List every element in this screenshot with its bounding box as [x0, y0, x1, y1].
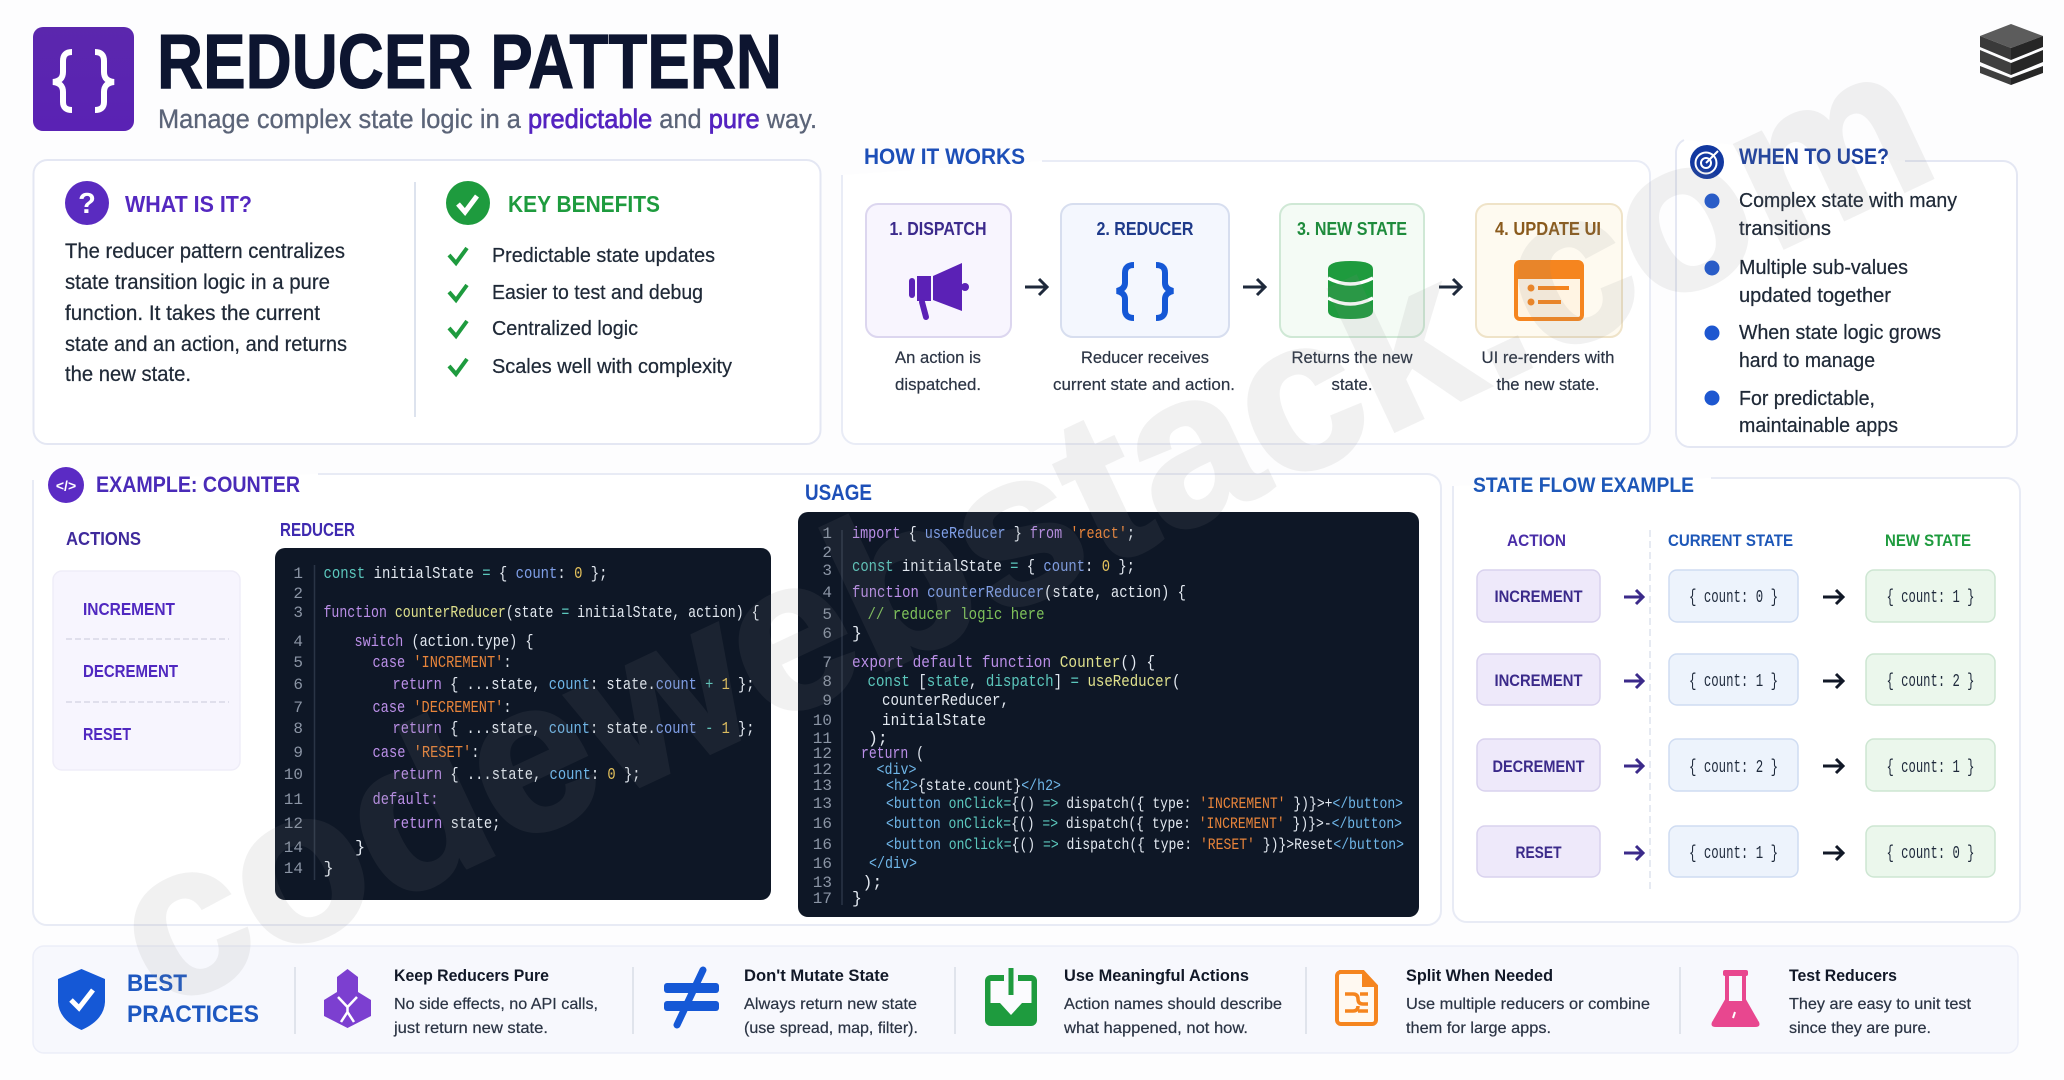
code block: usage: 1 [822, 525, 832, 543]
code block: reducer: 4 [293, 633, 303, 651]
list: benefits: Easier to test and debug [492, 282, 703, 304]
text block: definition: The reducer pattern centralizes [65, 240, 345, 263]
subtitle: Manage complex state logic in a predictable and pure way. [158, 104, 817, 134]
code block: usage: 9 [822, 692, 832, 710]
heading: example counter: EXAMPLE: COUNTER [96, 472, 300, 497]
step: reducer: 2. REDUCER [1096, 218, 1194, 239]
code block: usage: 12 [813, 761, 832, 779]
code block: usage: ); [862, 873, 882, 892]
panel: what is it and key benefits [34, 160, 820, 444]
step: update ui: 4. UPDATE UI [1495, 218, 1601, 239]
code block: usage: } [852, 889, 862, 908]
code block: reducer: 9 [293, 744, 303, 762]
code block: usage: 6 [822, 625, 832, 643]
best practice: split when needed: Split When Needed [1406, 966, 1553, 985]
text block: definition: function. It takes the current [65, 302, 320, 325]
icon: braces [1117, 265, 1173, 318]
code block: reducer: case 'DECREMENT': [372, 699, 512, 718]
flow row 2: { count: 1 } [1689, 672, 1778, 692]
code block: usage: 8 [822, 673, 832, 691]
best practice: keep reducers pure: No side effects, no API calls, [394, 996, 598, 1013]
code block: usage: return ( [861, 744, 924, 763]
list: benefits: Predictable state updates [492, 245, 715, 267]
code block: usage: 13 [813, 795, 832, 813]
list: actions: RESET [83, 724, 131, 744]
code block: usage: 16 [813, 836, 832, 854]
code block: reducer: case 'INCREMENT': [372, 654, 512, 673]
code block: reducer: 8 [293, 720, 303, 738]
flow row 2: { count: 2 } [1886, 672, 1974, 692]
best practice: use meaningful actions: what happened, not how. [1063, 1020, 1248, 1037]
flow row 1: INCREMENT [1494, 588, 1582, 606]
step: dispatch: An action is [895, 348, 981, 367]
best practice: don't mutate state: Don't Mutate State [744, 966, 889, 985]
column headers: NEW STATE [1885, 531, 1971, 550]
code block: usage: counterReducer, [882, 691, 1009, 710]
code block: reducer: default: [372, 791, 438, 810]
flow row 3: { count: 1 } [1886, 758, 1974, 778]
list: when to use: Complex state with many [1739, 190, 1957, 212]
code block: usage: 5 [822, 606, 832, 624]
code block: reducer: return { ...state, count: 0 }; [392, 766, 640, 785]
heading: how it works: HOW IT WORKS [864, 144, 1025, 169]
list: actions: INCREMENT [83, 599, 175, 619]
best practice: split when needed [1406, 966, 1650, 1037]
list: when to use: transitions [1739, 218, 1831, 240]
code block: reducer: 1 [293, 565, 303, 583]
code block: usage: 13 [813, 777, 832, 795]
code block: reducer: return { ...state, count: state.count + 1 }; [392, 676, 754, 695]
best practice: split when needed: Use multiple reducers or combine [1406, 996, 1650, 1013]
heading: actions: ACTIONS [66, 528, 141, 549]
icon: green check [446, 181, 490, 225]
panel: how it works [842, 144, 1650, 444]
flow row 3: { count: 2 } [1689, 758, 1778, 778]
code block: usage: </div> [869, 854, 917, 873]
column headers: CURRENT STATE [1668, 531, 1793, 550]
code block: reducer: return state; [392, 815, 500, 834]
code block: reducer: 10 [284, 766, 303, 784]
title: REDUCER PATTERN [157, 19, 782, 105]
list: actions [53, 571, 240, 770]
best practice: don't mutate state: (use spread, map, filter). [744, 1020, 918, 1037]
step: reducer: current state and action. [1053, 375, 1235, 394]
code block: usage: import { useReducer } from 'react'; [852, 524, 1135, 543]
code block: usage: 2 [822, 544, 832, 562]
code block: usage: initialState [882, 711, 986, 730]
icon: megaphone [909, 263, 969, 317]
icon: stacked layers logo [1980, 24, 2043, 85]
flow row 3: DECREMENT [1492, 758, 1584, 776]
code block: usage: function counterReducer(state, action) { [852, 583, 1186, 602]
icon: purple hexagon [324, 969, 371, 1028]
step: dispatch [866, 204, 1011, 394]
code block: usage: <button onClick={() => dispatch({ type: 'INCREMENT' })}>+</button> [886, 795, 1403, 813]
heading: best practices [127, 970, 259, 1028]
icon: flask [1712, 970, 1760, 1027]
heading: key benefits: KEY BENEFITS [508, 191, 660, 217]
step: reducer [1053, 204, 1235, 394]
code block: usage: 11 [813, 730, 832, 748]
code block: reducer: function counterReducer(state = initialState, action) { [324, 604, 760, 623]
step: update ui [1476, 204, 1622, 394]
code block: reducer: 12 [284, 815, 303, 833]
code block: usage: <h2>{state.count}</h2> [886, 777, 1061, 795]
flow row 2 [1477, 654, 1995, 705]
step: new state: Returns the new [1292, 348, 1413, 367]
code block: usage: <button onClick={() => dispatch({ type: 'RESET' })}>Reset</button> [886, 836, 1404, 854]
code block: reducer: 6 [293, 676, 303, 694]
best practice: keep reducers pure: just return new state. [393, 1020, 548, 1037]
code block: reducer: 14 [284, 860, 303, 878]
icon: ui window [1516, 262, 1582, 319]
code block: reducer: 2 [293, 585, 303, 603]
list: benefits [449, 245, 732, 378]
flow row 3 [1477, 739, 1995, 791]
arrow [1243, 279, 1265, 295]
panel: state flow example [1453, 474, 2020, 922]
icon: question mark [65, 181, 109, 225]
code block: usage: } [852, 624, 862, 643]
icon: target [1690, 145, 1724, 179]
best practice: test reducers: since they are pure. [1789, 1020, 1931, 1037]
icon: inbox [985, 968, 1037, 1026]
flow row 1 [1477, 570, 1995, 622]
code block: usage: 16 [813, 815, 832, 833]
watermark: codewebstack.com [77, 0, 1964, 1053]
best practice: don't mutate state [744, 966, 918, 1037]
code block: reducer: 3 [293, 604, 303, 622]
step: new state: state. [1332, 375, 1372, 394]
panel: best practices [33, 946, 2018, 1053]
code block: usage: // reducer logic here [868, 605, 1044, 624]
heading: usage: USAGE [805, 480, 872, 505]
code block: usage: 3 [822, 562, 832, 580]
list: benefits: Centralized logic [492, 318, 638, 340]
flow row 4 [1477, 826, 1995, 877]
list: when to use: When state logic grows [1739, 322, 1941, 344]
icon: code tag [48, 467, 84, 503]
heading: when to use: WHEN TO USE? [1739, 144, 1889, 169]
code block: reducer: } [324, 860, 334, 879]
best practice: test reducers: They are easy to unit test [1789, 996, 1972, 1013]
column headers: ACTION [1507, 531, 1566, 550]
code block: usage: export default function Counter() { [852, 653, 1155, 672]
heading: what is it: WHAT IS IT? [125, 191, 252, 217]
icon: question mark: ? [78, 188, 96, 220]
step: new state [1280, 204, 1424, 394]
best practice: use meaningful actions: Action names should describe [1064, 996, 1282, 1013]
text block: definition: the new state. [65, 363, 191, 386]
step: dispatch: dispatched. [895, 375, 981, 394]
code block: usage [798, 512, 1419, 917]
code block: reducer: return { ...state, count: state.count - 1 }; [392, 720, 754, 739]
column headers [1507, 531, 1971, 550]
arrow [1025, 279, 1047, 295]
best practice: keep reducers pure: Keep Reducers Pure [394, 966, 549, 985]
icon: database [1328, 261, 1373, 319]
code block: usage: 16 [813, 855, 832, 873]
step: update ui: the new state. [1496, 375, 1600, 394]
best practice: use meaningful actions: Use Meaningful Actions [1064, 966, 1249, 985]
flow row 1: { count: 1 } [1886, 588, 1974, 608]
list: when to use: Multiple sub-values [1739, 257, 1908, 279]
code block: reducer: 7 [293, 699, 303, 717]
best practice: test reducers: Test Reducers [1789, 966, 1897, 985]
best practice: split when needed: them for large apps. [1406, 1020, 1551, 1037]
code block: usage: ); [868, 729, 888, 748]
flow row 2: INCREMENT [1494, 672, 1582, 690]
code block: reducer: const initialState = { count: 0 }; [324, 565, 608, 584]
step: dispatch: 1. DISPATCH [890, 218, 986, 239]
step: new state: 3. NEW STATE [1297, 218, 1407, 239]
code block: reducer [275, 548, 771, 900]
arrow [1439, 279, 1461, 295]
icon: split file [1337, 972, 1376, 1024]
heading: state flow example: STATE FLOW EXAMPLE [1473, 474, 1694, 497]
heading: best practices: BEST [127, 970, 187, 997]
heading: reducer: REDUCER [280, 519, 355, 540]
list: when to use: maintainable apps [1739, 415, 1898, 437]
flow row 4: { count: 0 } [1886, 844, 1974, 864]
list: benefits: Scales well with complexity [492, 356, 732, 378]
code block: usage: 7 [822, 654, 832, 672]
code block: usage: 13 [813, 874, 832, 892]
header logo: curly braces tile [33, 27, 134, 131]
best practice: use meaningful actions [1063, 966, 1282, 1037]
panel: example counter [33, 467, 1441, 925]
list: when to use [1704, 190, 1957, 437]
code block: reducer: switch (action.type) { [354, 633, 534, 652]
heading: best practices: PRACTICES [127, 1001, 259, 1028]
code block: reducer: 5 [293, 654, 303, 672]
icon: shield [58, 969, 105, 1030]
best practice: test reducers [1789, 966, 1972, 1037]
code block: usage: 12 [813, 745, 832, 763]
code block: reducer: 11 [284, 791, 303, 809]
text block: definition: state and an action, and returns [65, 333, 347, 356]
code block: usage: const [state, dispatch] = useReducer( [868, 672, 1180, 691]
text block: definition: state transition logic in a pure [65, 271, 330, 294]
code block: reducer: case 'RESET': [372, 744, 480, 763]
list: when to use: For predictable, [1739, 388, 1875, 410]
code block: reducer: 14 [284, 839, 303, 857]
code block: usage: <div> [876, 761, 916, 779]
list: actions: DECREMENT [83, 661, 178, 681]
step: reducer: Reducer receives [1081, 348, 1209, 367]
step: update ui: UI re-renders with [1482, 348, 1614, 367]
best practice: don't mutate state: Always return new state [744, 996, 917, 1013]
code block: reducer: } [355, 839, 365, 858]
code block: usage: 17 [813, 890, 832, 908]
icon: not equal [664, 970, 719, 1025]
flow row 4: RESET [1516, 844, 1562, 862]
list: when to use: updated together [1739, 285, 1891, 307]
code block: usage: 4 [822, 584, 832, 602]
flow row 4: { count: 1 } [1689, 844, 1778, 864]
panel: when to use [1676, 140, 2017, 447]
best practice: keep reducers pure [393, 966, 598, 1037]
list: when to use: hard to manage [1739, 350, 1875, 372]
code block: usage: <button onClick={() => dispatch({ type: 'INCREMENT' })}>-</button> [886, 815, 1402, 833]
flow row 1: { count: 0 } [1689, 588, 1778, 608]
icon: code tag: </> [56, 478, 76, 494]
code block: usage: const initialState = { count: 0 }; [852, 557, 1135, 576]
code block: usage: 10 [813, 712, 832, 730]
text block: definition [65, 240, 347, 386]
